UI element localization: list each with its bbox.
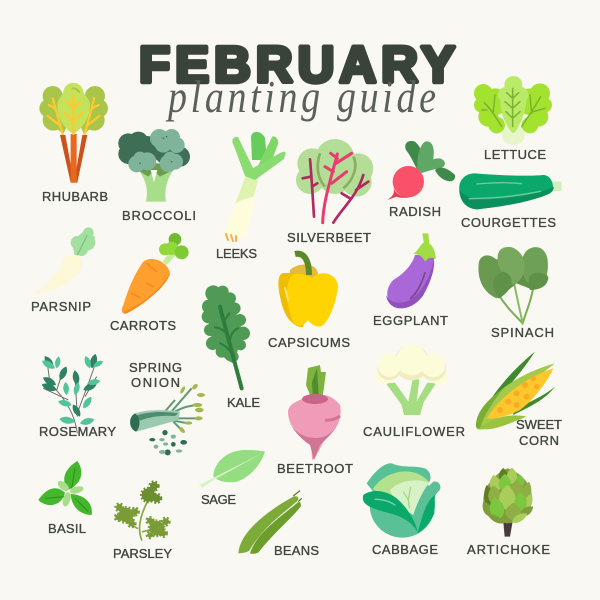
label: beetroot: BEETROOT	[277, 461, 353, 476]
label: leeks: LEEKS	[216, 246, 257, 261]
label: spinach: SPINACH	[491, 325, 554, 340]
icon: spinach	[478, 247, 548, 323]
icon: cabbage	[363, 463, 440, 538]
label: rhubarb: RHUBARB	[42, 189, 108, 204]
label: sweet corn: SWEET	[516, 417, 562, 432]
label: rosemary: ROSEMARY	[39, 424, 116, 439]
icon: lettuce	[474, 76, 552, 145]
icon: silverbeet	[296, 139, 373, 223]
label: sage: SAGE	[201, 492, 236, 507]
label: parsley: PARSLEY	[113, 546, 172, 561]
icon: parsnip	[32, 227, 95, 294]
icon: courgette	[459, 173, 562, 209]
subtitle: planting guide: planting guide	[165, 73, 436, 123]
label: silverbeet: SILVERBEET	[287, 230, 371, 245]
icon: beans	[238, 491, 302, 554]
icon: cauliflower	[375, 345, 448, 415]
label: cauliflower: CAULIFLOWER	[363, 424, 465, 439]
label: kale: KALE	[227, 395, 260, 410]
label: courgettes: COURGETTES	[461, 215, 556, 230]
icon: beetroot	[288, 365, 341, 460]
icon: kale	[202, 285, 250, 388]
label: parsnip: PARSNIP	[31, 299, 91, 314]
label: spring onion: SPRING	[129, 360, 182, 375]
icon: rhubarb	[39, 83, 108, 183]
icon: sage	[199, 450, 265, 488]
label: sweet corn: CORN	[519, 433, 559, 448]
icon: capsicum	[278, 254, 338, 327]
label: cabbage: CABBAGE	[372, 542, 438, 557]
label: spring onion	[129, 360, 182, 390]
label: artichoke: ARTICHOKE	[467, 542, 550, 557]
label: spring onion: ONION	[131, 375, 180, 390]
icon: parsley	[115, 482, 169, 540]
label: sweet corn	[516, 417, 562, 448]
icon: artichoke	[479, 468, 535, 537]
label: broccoli: BROCCOLI	[122, 208, 196, 223]
icon: radish	[387, 141, 455, 200]
icon: broccoli	[118, 129, 190, 202]
label: basil: BASIL	[48, 521, 86, 536]
label: eggplant: EGGPLANT	[373, 313, 448, 328]
icon: spring onion	[130, 383, 205, 455]
icon: basil	[38, 461, 92, 515]
icon: rosemary	[40, 353, 104, 433]
label: capsicums: CAPSICUMS	[268, 335, 350, 350]
icon: eggplant	[386, 233, 436, 308]
title: February: FEBRUARY	[139, 36, 455, 93]
label: lettuce: LETTUCE	[484, 147, 546, 162]
label: carrots: CARROTS	[110, 318, 176, 333]
icon: carrot	[122, 233, 189, 314]
icon: sweet corn	[476, 352, 555, 429]
icon: leeks	[223, 132, 285, 241]
label: radish: RADISH	[389, 204, 441, 219]
label: beans: BEANS	[274, 543, 319, 558]
